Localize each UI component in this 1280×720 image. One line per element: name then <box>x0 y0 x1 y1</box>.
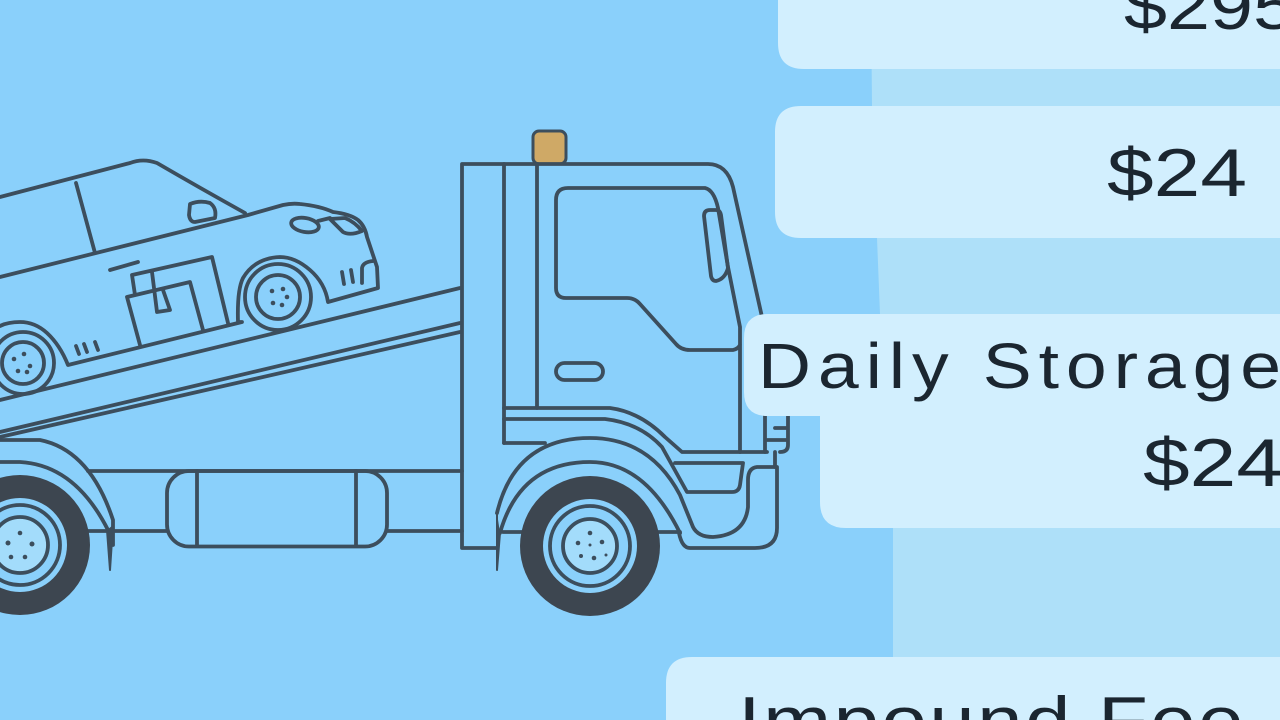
front wheel <box>520 476 660 616</box>
card: daily storage: Daily Storage <box>758 330 1280 402</box>
icon: tow truck <box>0 131 788 570</box>
card: $24 <box>775 106 1280 238</box>
door handle <box>556 363 603 380</box>
headlights <box>290 216 320 234</box>
car door <box>76 183 95 253</box>
car vents <box>76 261 373 354</box>
rear wheel <box>0 475 90 615</box>
car mirror <box>189 202 215 222</box>
wheel hub dots on towed car <box>12 287 289 374</box>
right pale background column <box>871 0 1280 720</box>
card: daily storage <box>744 314 1280 528</box>
mirror <box>704 210 728 281</box>
fuel tank <box>167 471 387 546</box>
rear fender <box>0 440 113 545</box>
flatbed ramp <box>0 288 460 437</box>
car box <box>127 257 228 345</box>
tail light <box>765 416 788 467</box>
chassis <box>88 471 462 531</box>
car wheels <box>245 264 311 330</box>
beacon light <box>533 131 566 164</box>
car body <box>0 160 245 213</box>
card: daily storage: $24 <box>1143 425 1280 501</box>
front fender and bumper <box>497 438 777 548</box>
card: top price <box>778 0 1280 69</box>
cab window <box>556 188 740 452</box>
card: impound fee <box>666 657 1280 720</box>
card: $24: $24 <box>1107 135 1247 211</box>
cab sill and bumper lines <box>504 408 767 452</box>
towed car <box>0 160 378 394</box>
truck cab <box>462 164 762 548</box>
fender spike <box>497 513 500 570</box>
